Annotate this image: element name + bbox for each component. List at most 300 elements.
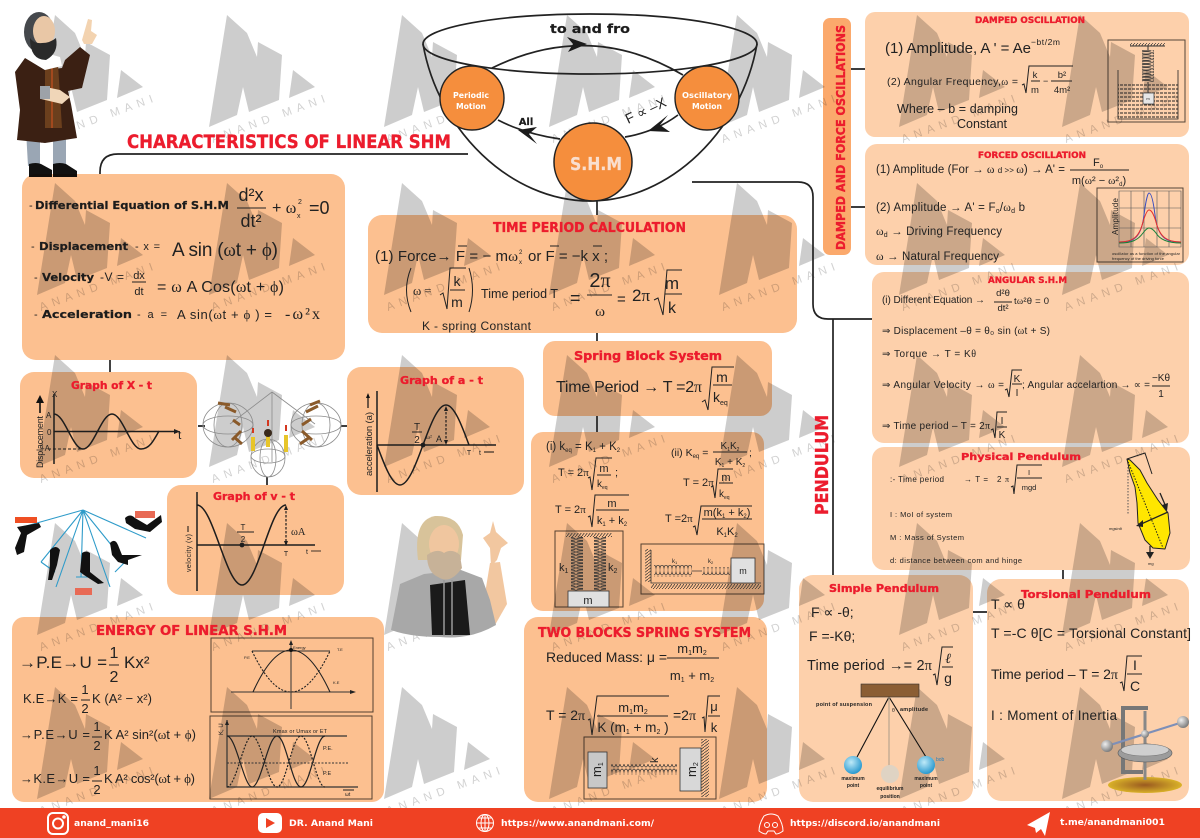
series formulas: 2 xyxy=(624,522,628,528)
diagram: series springs: k xyxy=(708,559,711,565)
time period formula: mgd xyxy=(1022,483,1036,492)
time period: ⇒ Time period – T = 2π xyxy=(882,421,990,432)
amplitude formula 1: o xyxy=(1100,164,1104,170)
time period formula: → T = xyxy=(964,475,988,484)
panel: graph of X - t xyxy=(20,372,197,478)
website: https://www.anandmani.com/ xyxy=(501,819,655,829)
potential energy formula: 1 xyxy=(110,645,119,662)
acceleration: Acceleration xyxy=(42,309,132,321)
two block period: ) xyxy=(660,720,669,735)
chart: acceleration: acceleration (a) xyxy=(364,412,375,476)
parallel formulas: K xyxy=(730,441,737,452)
time period formula: m xyxy=(665,274,679,293)
angular frequency formula: m xyxy=(1031,85,1039,96)
parallel formulas: = xyxy=(699,447,708,459)
series formulas: + K xyxy=(596,441,617,453)
spring block formula: eq xyxy=(720,400,728,407)
parallel formulas: 2 xyxy=(742,463,745,469)
kinetic energy time formula xyxy=(20,763,195,797)
time period formula: ℓ xyxy=(945,652,951,667)
chart: energy vs displacement: T.E xyxy=(337,647,343,652)
diagram: two blocks: k xyxy=(649,757,661,763)
diagram: parallel springs: k xyxy=(608,562,614,574)
circle: oscillatory motion: Motion xyxy=(692,102,722,111)
reduced mass: 1 xyxy=(681,677,685,684)
force formula: F =-Kθ; xyxy=(809,628,855,644)
time period: K xyxy=(999,430,1006,441)
parallel formulas: T = 2π xyxy=(683,477,714,489)
velocity: - xyxy=(34,272,38,284)
panel: characteristics xyxy=(22,174,345,360)
panel: spring block system xyxy=(543,341,772,416)
parallel formulas: + k xyxy=(725,507,744,519)
chart: velocity: T xyxy=(241,523,246,532)
heading: characteristics of linear SHM: CHARACTERISTICS OF LINEAR SHM xyxy=(127,132,451,153)
driving frequency: → Driving Frequency xyxy=(888,226,1002,238)
chart: velocity: ωA xyxy=(291,527,306,538)
series formulas: 1 xyxy=(602,522,606,528)
side label: pendulum: PENDULUM xyxy=(812,415,833,515)
chart: acceleration: ω² xyxy=(426,435,432,441)
differential equation: + ω xyxy=(272,200,296,217)
panel heading: Spring Block System xyxy=(574,349,722,363)
differential equation: tω²θ = 0 xyxy=(1014,296,1049,307)
angular velocity: ⇒ Angular Velocity → ω = xyxy=(882,380,1004,391)
two block period: μ xyxy=(710,699,718,714)
series formulas: eq xyxy=(602,485,608,491)
arrow: periodic to oscillatory arc xyxy=(492,37,683,75)
time period formula: k xyxy=(668,300,677,317)
two block period: m xyxy=(633,700,644,715)
parallel formulas: K xyxy=(716,526,724,538)
force formula: (1) Force→ F = − mω xyxy=(375,248,518,265)
time period formula xyxy=(890,465,1042,494)
circle: oscillatory motion xyxy=(675,66,739,130)
panel heading: ENERGY OF LINEAR S.H.M xyxy=(96,624,287,639)
parallel formulas: 2 xyxy=(737,447,740,453)
figure: torsion apparatus xyxy=(1101,708,1189,793)
panel heading: Simple Pendulum xyxy=(829,583,939,595)
reduced mass: 2 xyxy=(703,650,707,657)
amplitude formula 1: m(ω² − ω² xyxy=(1072,175,1119,187)
velocity: -V = xyxy=(100,270,124,284)
label: to and fro: to and fro xyxy=(550,21,630,36)
spring constant note: K - spring Constant xyxy=(422,319,532,333)
angular velocity: ; Angular accelartion → ∝ = xyxy=(1022,380,1150,391)
differential equation: d²x xyxy=(238,185,264,205)
panel: damped oscillation xyxy=(865,12,1189,137)
potential energy time formula: →P.E→U = xyxy=(20,727,90,742)
diagram: simple pendulum: equilibrium xyxy=(877,786,904,792)
force formula: x xyxy=(519,260,522,266)
amplitude formula: (1) Amplitude, A ' = Ae xyxy=(885,40,1031,57)
time period formula: I xyxy=(1028,468,1030,477)
panel: graph of v - t xyxy=(167,485,344,595)
reduced mass: 2 xyxy=(710,677,714,684)
figure: Galileo pointing xyxy=(15,12,97,177)
panel heading: DAMPED OSCILLATION xyxy=(975,16,1085,26)
kinetic energy formula: 1 xyxy=(81,682,89,697)
diagram: two blocks: m xyxy=(684,766,699,777)
diagram: SHM bowl xyxy=(423,14,757,201)
amplitude formula 2: / xyxy=(1000,202,1004,214)
series formulas: T = 2π xyxy=(555,504,586,516)
panel heading: Physical Pendulum xyxy=(961,452,1081,463)
angular velocity: I xyxy=(1016,388,1018,399)
natural frequency: ω → Natural Frequency xyxy=(876,251,999,263)
velocity: dt xyxy=(134,286,144,298)
reduced mass: + m xyxy=(685,668,710,683)
parallel formulas: K xyxy=(727,526,735,538)
circle: SHM xyxy=(554,123,632,201)
panel: graph of a - t xyxy=(347,367,524,495)
amplitude formula 1: ) xyxy=(1122,175,1126,187)
chart: resonance curves xyxy=(1097,188,1183,262)
potential energy time formula xyxy=(20,719,196,753)
two block period: =2π xyxy=(673,707,696,724)
series formulas: ; xyxy=(615,467,618,479)
differential equation: Differential Equation of S.H.M xyxy=(35,200,229,212)
reduced mass xyxy=(546,641,719,684)
figure: swing illustration xyxy=(15,510,162,595)
displacement: - xyxy=(31,241,35,253)
diagram: series springs: 1 xyxy=(675,560,678,565)
potential energy formula: 2 xyxy=(110,669,119,686)
connector lines xyxy=(100,69,1063,612)
displacement xyxy=(31,240,278,261)
two block period: m xyxy=(618,700,629,715)
two block period: K (m xyxy=(597,720,626,735)
differential equation: dt² xyxy=(240,211,262,231)
parallel formulas: eq xyxy=(693,454,699,460)
chart: energy vs time xyxy=(210,716,372,799)
parallel formulas: K xyxy=(721,441,727,452)
displacement: ⇒ Displacement –θ = θ₀ sin (ωt + S) xyxy=(882,326,1050,337)
displacement: A sin (ωt + ϕ) xyxy=(172,240,278,261)
footer bar xyxy=(0,808,1200,838)
two block period: + m xyxy=(630,720,656,735)
chart: energy vs displacement: K.E xyxy=(333,680,340,685)
reduced mass: m xyxy=(677,641,688,656)
parallel formulas: 2 xyxy=(734,533,738,539)
chart: resonance curves: frequency of the driving force xyxy=(1112,256,1165,261)
angular velocity xyxy=(882,370,1170,400)
chart: energy vs displacement xyxy=(211,638,373,712)
time period formula xyxy=(807,647,953,686)
diagram: simple pendulum: θ xyxy=(892,708,895,714)
angular velocity: −Kθ xyxy=(1152,373,1170,384)
time period: I xyxy=(1001,416,1003,427)
panel: simple pendulum xyxy=(799,575,973,802)
kinetic energy time formula: 2 xyxy=(93,782,101,797)
chart: acceleration: t xyxy=(479,450,481,457)
angular frequency formula: 4m² xyxy=(1054,85,1070,96)
time period formula xyxy=(991,656,1142,694)
moment of inertia note: I : MoI of system xyxy=(890,510,952,519)
mass note: M : Mass of System xyxy=(890,533,964,542)
time period formula: :- Time period xyxy=(890,475,944,484)
velocity: = ω A Cos(ωt + ϕ) xyxy=(157,279,284,296)
two block period xyxy=(546,696,720,736)
differential equation: x xyxy=(297,213,301,220)
omega formula: ω = xyxy=(413,284,431,298)
spring block formula: m xyxy=(716,369,728,385)
panel: two blocks spring system xyxy=(524,617,767,802)
panel heading: TIME PERIOD CALCULATION xyxy=(493,221,686,236)
parallel formulas: 1 xyxy=(724,533,728,539)
panel heading: TWO BLOCKS SPRING SYSTEM xyxy=(538,626,751,641)
series formulas: + k xyxy=(606,515,624,527)
amplitude formula 2: ω xyxy=(1003,202,1011,214)
damping note: Constant xyxy=(957,117,1008,131)
diagram: simple pendulum: point xyxy=(920,783,932,789)
diagram: two blocks: m xyxy=(589,766,604,777)
two block period: 2 xyxy=(644,709,648,716)
chart: acceleration: T xyxy=(467,450,472,457)
chart: velocity: velocity (v) xyxy=(186,534,193,572)
diagram: damped spring: m xyxy=(1146,96,1150,101)
potential energy formula xyxy=(19,645,150,686)
reduced mass: m xyxy=(692,641,703,656)
distance note: d: distance between com and hinge xyxy=(890,556,1022,565)
torque relation: T ∝ θ xyxy=(991,596,1025,612)
chart: resonance curves: oscillator as a function of the angular xyxy=(1112,251,1181,256)
potential energy time formula: 2 xyxy=(93,738,101,753)
time period formula: g xyxy=(944,670,952,686)
chart: velocity: T xyxy=(284,551,289,558)
potential energy formula: →P.E→U = xyxy=(19,653,107,672)
diagram: series springs xyxy=(641,544,764,594)
panel: torsional pendulum xyxy=(987,579,1191,801)
differential equation: d²θ xyxy=(996,288,1010,299)
figure: chandelier pendulum xyxy=(203,392,341,477)
time period formula: Time period – T = 2π xyxy=(991,666,1118,683)
amplitude formula: −bt/2m xyxy=(1031,37,1060,47)
diagram: parallel springs: 1 xyxy=(564,568,568,575)
differential equation xyxy=(882,288,1049,314)
graph heading: Graph of X - t xyxy=(71,380,152,392)
parallel formulas: 1 xyxy=(722,463,725,469)
amplitude formula 2: b xyxy=(1015,202,1025,214)
parallel formulas: m(k xyxy=(704,507,722,519)
time period formula: Time period →= 2π xyxy=(807,658,933,674)
velocity: dx xyxy=(133,270,145,282)
differential equation: 2 xyxy=(298,199,302,206)
time period formula: 2π xyxy=(589,270,611,292)
instagram handle: anand_mani16 xyxy=(74,819,149,829)
time period formula: ω xyxy=(595,304,605,320)
angular velocity: K xyxy=(1014,374,1021,385)
figure: old scientist pointing xyxy=(391,516,508,638)
chart: displacement xyxy=(35,390,182,468)
differential equation: =0 xyxy=(309,198,330,218)
parallel formulas: (ii) K xyxy=(671,447,693,459)
chart: velocity: t xyxy=(306,549,308,556)
chart: acceleration: A xyxy=(436,434,442,444)
spring block formula: Time Period → T =2π xyxy=(556,379,702,396)
chart: energy vs displacement: Energy xyxy=(293,645,306,650)
two block period: 1 xyxy=(629,709,633,716)
potential energy formula: Kx² xyxy=(124,653,150,672)
driving frequency: ω xyxy=(876,226,884,238)
icon: instagram xyxy=(48,813,68,834)
panel: energy of linear SHM xyxy=(12,617,384,802)
chart: resonance curves: Amplitude xyxy=(1111,197,1120,235)
time period formula: 2 π xyxy=(997,475,1009,484)
parallel formulas: eq xyxy=(724,495,730,501)
diagram: damped spring xyxy=(1108,40,1185,122)
amplitude formula 1: (1) Amplitude (For → ω d >> ω) → A' = xyxy=(876,164,1065,176)
torque: ⇒ Torque → T = Kθ xyxy=(882,349,976,360)
parallel formulas: 1 xyxy=(722,514,726,520)
damping note xyxy=(897,102,1018,131)
series formulas: (i) k xyxy=(546,441,565,453)
force formula: 2 xyxy=(519,250,523,256)
parallel formulas: ; xyxy=(749,447,752,459)
amplitude formula 1 xyxy=(876,157,1129,188)
angular frequency formula xyxy=(887,66,1073,96)
diagram: physical pendulum xyxy=(1109,453,1170,566)
series formulas: = K xyxy=(572,441,593,453)
chart: energy vs time: Kmax or Umax or ET xyxy=(273,729,328,735)
time period xyxy=(882,412,1007,441)
omega formula: m xyxy=(451,294,463,310)
circle: periodic motion: Periodic xyxy=(453,91,489,100)
label: force proportional: F ∝ –X xyxy=(623,94,669,127)
torque formula: T =-C θ[C = Torsional Constant] xyxy=(991,625,1191,641)
acceleration: - a = xyxy=(137,309,167,321)
angular frequency formula: (2) Angular Frequency,ω = xyxy=(887,76,1018,88)
kinetic energy time formula: 1 xyxy=(93,763,101,778)
parallel formulas: 2 xyxy=(743,514,747,520)
arrow: periodic to SHM xyxy=(498,120,560,144)
circle: periodic motion: Motion xyxy=(456,102,486,111)
diagram: simple pendulum: position xyxy=(880,794,900,800)
angular velocity: 1 xyxy=(1158,389,1164,400)
series formulas: eq xyxy=(565,448,572,454)
amplitude formula 2: (2) Amplitude → A' = F xyxy=(876,202,996,214)
diagram: simple pendulum: maximum xyxy=(914,776,938,782)
kinetic energy time formula: →K.E→U = xyxy=(20,771,90,786)
panel heading: ANGULAR S.H.M xyxy=(988,276,1067,286)
panel: angular SHM xyxy=(872,272,1189,443)
diagram: physical pendulum: mg xyxy=(1148,561,1154,566)
arrow: SHM to oscillatory xyxy=(625,115,678,137)
potential energy time formula: 1 xyxy=(93,719,101,734)
displacement: Displacement xyxy=(39,241,128,253)
series formulas: k xyxy=(597,479,602,490)
moment of inertia note: I : Moment of Inertia xyxy=(991,708,1117,723)
diagram: simple pendulum: amplitude xyxy=(900,707,928,713)
graph heading: Graph of a - t xyxy=(400,375,483,387)
parallel formulas: 1 xyxy=(727,447,730,453)
two block period: 1 xyxy=(626,729,630,736)
force formula xyxy=(375,246,608,266)
diagram: two blocks: 2 xyxy=(693,762,700,766)
kinetic energy formula: K.E→K = xyxy=(23,691,78,706)
graph heading: Graph of v - t xyxy=(213,491,295,503)
time period formula: C xyxy=(1130,678,1140,694)
chart: energy vs time: K, U xyxy=(219,723,225,735)
diagram: parallel springs: k xyxy=(559,562,564,574)
parallel formulas xyxy=(665,441,752,539)
two block period: T = 2π xyxy=(546,707,585,724)
damping note: Where – b = damping xyxy=(897,102,1018,116)
diagram: series springs: 2 xyxy=(711,560,714,565)
diagram: physical pendulum: mgsinθ xyxy=(1109,526,1123,531)
panel heading: Torsional Pendulum xyxy=(1021,589,1151,601)
omega formula: Time period T xyxy=(481,287,558,301)
diagram: series springs: k xyxy=(672,559,675,565)
time period formula: = xyxy=(617,291,626,308)
chart: displacement: -A xyxy=(42,444,51,453)
circle: periodic motion xyxy=(440,66,504,130)
parallel formulas: m xyxy=(721,472,731,484)
side label: damped and force oscillations: DAMPED AND FORCE OSCILLATIONS xyxy=(833,25,848,250)
circle: oscillatory motion: Oscillatory xyxy=(682,91,732,100)
chart: acceleration: 2 xyxy=(414,435,420,446)
reduced mass: Reduced Mass: μ = xyxy=(546,649,667,665)
series formulas: T = 2π xyxy=(558,467,589,479)
velocity: Velocity xyxy=(42,272,94,284)
two block period: 2 xyxy=(656,729,660,736)
series formulas xyxy=(546,441,629,528)
time period formula: = xyxy=(570,288,581,308)
acceleration xyxy=(34,306,320,323)
driving frequency: d xyxy=(884,232,888,239)
amplitude formula 2: d xyxy=(1011,208,1015,215)
panel: physical pendulum xyxy=(872,447,1190,570)
velocity xyxy=(34,270,284,298)
diagram: simple pendulum: maximum xyxy=(841,776,865,782)
amplitude formula 2: o xyxy=(996,208,1000,215)
kinetic energy formula: 2 xyxy=(81,701,89,716)
discord link: https://discord.io/anandmani xyxy=(790,819,940,829)
chart: energy vs time: ωt xyxy=(345,792,351,798)
chart: acceleration xyxy=(364,391,496,492)
spring block formula xyxy=(556,367,734,410)
chart: velocity xyxy=(186,492,321,591)
chart: displacement: X xyxy=(52,390,58,399)
diagram: two blocks xyxy=(584,737,716,799)
icon: telegram xyxy=(1027,812,1050,836)
series formulas: m xyxy=(607,498,617,510)
time period formula: 2π xyxy=(632,286,650,305)
panel: spring combinations xyxy=(531,432,764,611)
kinetic energy formula: K (A² − x²) xyxy=(92,691,152,706)
potential energy time formula: K A² sin²(ωt + ϕ) xyxy=(104,727,196,742)
label: all: All xyxy=(519,117,533,128)
diagram: parallel springs: m xyxy=(583,595,593,607)
diagram: parallel springs xyxy=(555,531,623,607)
acceleration: A sin(ωt + ϕ ) = xyxy=(177,307,272,322)
telegram link: t.me/anandmani001 xyxy=(1060,818,1165,828)
diagram: parallel springs: 2 xyxy=(614,568,618,575)
youtube name: DR. Anand Mani xyxy=(289,819,373,829)
kinetic energy formula xyxy=(23,682,152,716)
amplitude formula 1: d xyxy=(1119,182,1122,188)
force relation: F ∝ -θ; xyxy=(811,604,854,620)
diagram: simple pendulum xyxy=(816,684,945,800)
parallel formulas: T =2π xyxy=(665,513,693,525)
differential equation: dt² xyxy=(997,303,1009,314)
diagram: two blocks: 1 xyxy=(598,762,605,766)
omega formula xyxy=(406,268,558,312)
series formulas: m xyxy=(599,463,609,475)
differential equation: (i) Different Equation → xyxy=(882,295,985,306)
angular frequency formula: − xyxy=(1043,76,1048,86)
differential equation: - xyxy=(29,200,33,212)
